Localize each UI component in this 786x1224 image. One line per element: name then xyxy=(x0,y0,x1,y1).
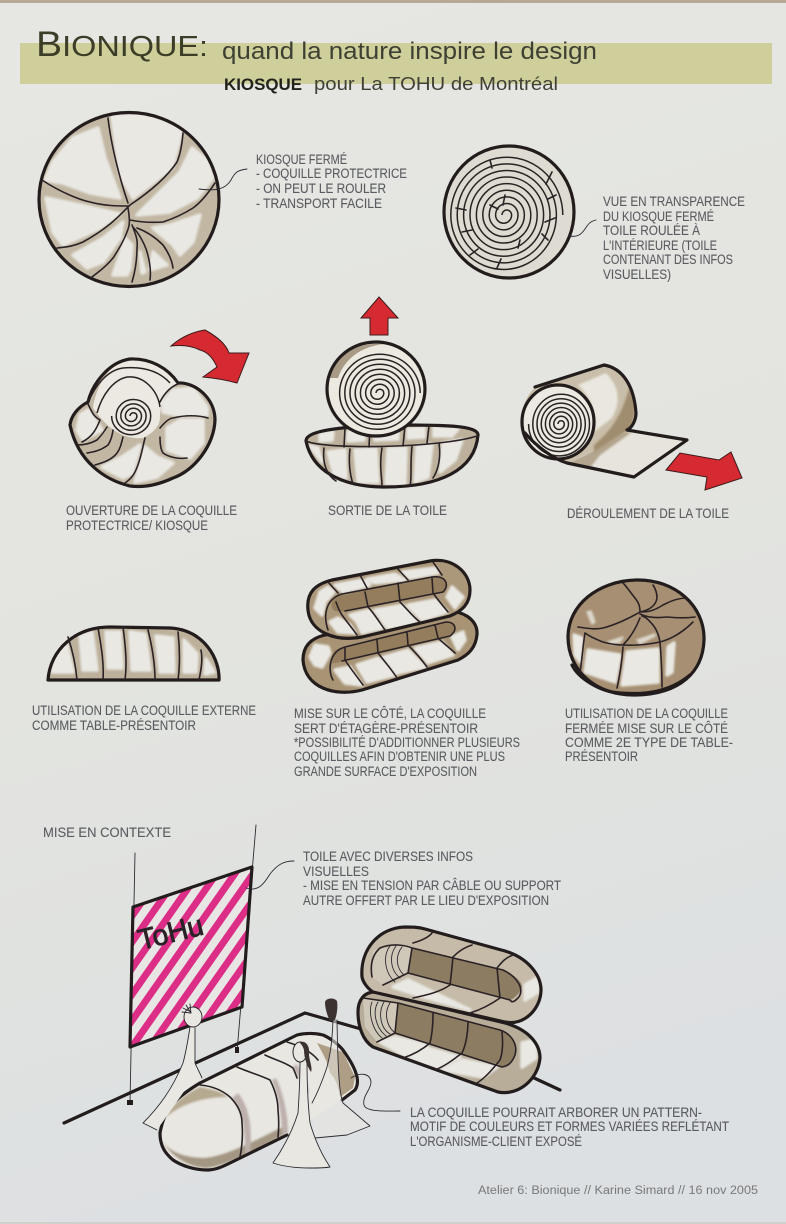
caption: banner: AUTRE OFFERT PAR LE LIEU D'EXPOSITION xyxy=(303,893,549,908)
caption: stacked shells: SERT D'ÉTAGÈRE-PRÉSENTOIR xyxy=(294,721,478,736)
title: BIONIQUE: xyxy=(36,25,208,64)
caption: closed kiosk xyxy=(256,152,407,211)
figure right xyxy=(312,998,370,1138)
caption: canvas leaving: SORTIE DE LA TOILE xyxy=(328,503,447,518)
caption: shell pattern xyxy=(410,1105,729,1149)
arrow: up xyxy=(361,297,398,335)
caption: shell pattern: MOTIF DE COULEURS ET FORMES VARIÉES REFLÉTANT xyxy=(410,1119,729,1134)
stacked shells in scene xyxy=(358,927,541,1093)
caption: closed kiosk: KIOSQUE FERMÉ xyxy=(256,152,347,167)
lower shell xyxy=(303,611,477,692)
caption: closed shell table: UTILISATION DE LA COQUILLE xyxy=(565,706,728,721)
title: quand la nature inspire le design xyxy=(222,38,597,65)
foreground shell xyxy=(160,1034,357,1170)
caption: stacked shells: GRANDE SURFACE D'EXPOSITION xyxy=(294,764,477,779)
subtitle: pour La TOHU de Montréal xyxy=(314,74,558,94)
heading: context: MISE EN CONTEXTE xyxy=(43,825,171,840)
caption: transparent view: VISUELLES) xyxy=(603,267,671,282)
illustration: shell opening xyxy=(70,359,215,487)
subtitle xyxy=(224,74,558,94)
caption: stacked shells: COQUILLES AFIN D'OBTENIR UNE PLUS xyxy=(294,749,505,764)
leader: transparent view xyxy=(569,220,596,236)
caption: closed shell table: PRÉSENTOIR xyxy=(565,749,638,764)
illustration: canvas leaving shell xyxy=(306,342,478,487)
illustration: transparent view of closed kiosk xyxy=(444,146,574,278)
caption: closed kiosk: - TRANSPORT FACILE xyxy=(256,196,382,211)
banner poles xyxy=(130,825,256,1103)
caption: shell as table: COMME TABLE-PRÉSENTOIR xyxy=(32,718,196,733)
rolled canvas ball xyxy=(327,342,425,436)
title xyxy=(36,25,597,65)
illustration: context scene xyxy=(64,825,560,1170)
figure centre xyxy=(273,1042,330,1168)
caption: banner: TOILE AVEC DIVERSES INFOS xyxy=(303,849,473,864)
banner logo: ToHu xyxy=(135,910,207,957)
caption: shell as table: UTILISATION DE LA COQUILLE EXTERNE xyxy=(32,703,256,718)
caption: shell pattern: LA COQUILLE POURRAIT ARBORER UN PATTERN- xyxy=(410,1105,702,1120)
caption: closed shell table: COMME 2E TYPE DE TABLE- xyxy=(565,735,733,750)
illustration: closed kiosk shell xyxy=(39,112,219,286)
caption: stacked shells xyxy=(294,706,520,779)
caption: transparent view: L'INTÉRIEURE (TOILE xyxy=(603,238,717,253)
leader: banner xyxy=(246,861,294,889)
caption: shell opening: PROTECTRICE/ KIOSQUE xyxy=(66,518,208,533)
caption: closed kiosk: - ON PEUT LE ROULER xyxy=(256,181,386,196)
shell bowl xyxy=(306,425,478,487)
lower scene shell xyxy=(358,992,540,1093)
caption: banner xyxy=(303,849,561,908)
figures xyxy=(143,998,370,1168)
caption: transparent view xyxy=(603,194,745,282)
figure left xyxy=(143,1004,202,1130)
caption: transparent view: TOILE ROULÉE À xyxy=(603,223,700,238)
illustration: shell as table xyxy=(48,627,219,680)
arrow: curved opening xyxy=(171,330,249,383)
caption: closed shell table xyxy=(565,706,733,764)
leader: shell pattern xyxy=(351,1074,400,1111)
footer credit: Atelier 6: Bionique // Karine Simard // 16 nov 2005 xyxy=(478,1185,758,1197)
caption: transparent view: CONTENANT DES INFOS xyxy=(603,252,733,267)
caption: shell as table xyxy=(32,703,256,733)
banner xyxy=(130,867,252,1047)
upper shell xyxy=(308,560,470,638)
caption: closed kiosk: - COQUILLE PROTECTRICE xyxy=(256,166,407,181)
caption: closed shell table: FERMÉE MISE SUR LE CÔTÉ xyxy=(565,721,728,736)
caption: transparent view: VUE EN TRANSPARENCE xyxy=(603,194,745,209)
title band xyxy=(20,43,772,84)
caption: unrolling: DÉROULEMENT DE LA TOILE xyxy=(567,506,729,521)
leader: closed kiosk xyxy=(199,169,247,190)
caption: banner: - MISE EN TENSION PAR CÂBLE OU SUPPORT xyxy=(303,878,561,893)
illustration: stacked shells as shelf xyxy=(303,560,477,692)
upper scene shell xyxy=(362,927,541,1023)
caption: shell opening: OUVERTURE DE LA COQUILLE xyxy=(66,503,237,518)
caption: stacked shells: MISE SUR LE CÔTÉ, LA COQUILLE xyxy=(294,706,486,721)
floor line xyxy=(64,1013,560,1123)
illustration: closed shell on its side as table xyxy=(568,580,704,695)
illustration: unrolling canvas xyxy=(522,365,687,477)
caption: stacked shells: *POSSIBILITÉ D'ADDITIONNER PLUSIEURS xyxy=(294,735,520,750)
caption: transparent view: DU KIOSQUE FERMÉ xyxy=(603,209,714,224)
subtitle: KIOSQUE xyxy=(224,75,302,94)
arrow: unrolling direction xyxy=(666,452,742,490)
caption: banner: VISUELLES xyxy=(303,864,369,879)
caption: shell pattern: L'ORGANISME-CLIENT EXPOSÉ xyxy=(410,1134,582,1149)
caption: shell opening xyxy=(66,503,237,533)
